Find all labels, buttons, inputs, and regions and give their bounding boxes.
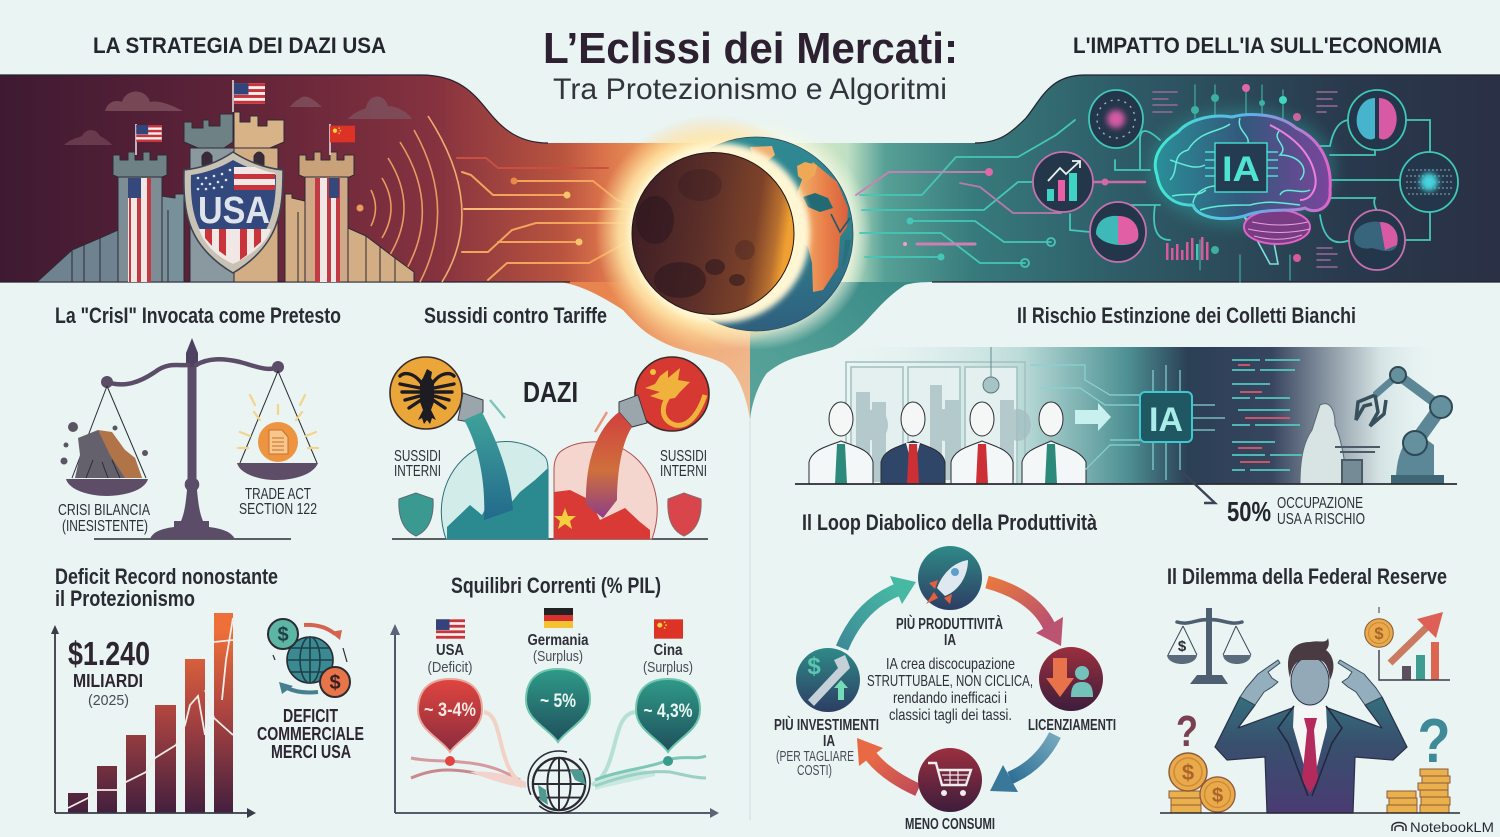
pans	[66, 371, 318, 496]
pin: usa	[418, 679, 482, 752]
earth	[659, 137, 853, 331]
jacket	[1215, 697, 1407, 813]
lapels	[1278, 706, 1342, 796]
icon: globe and currency exchange	[268, 619, 350, 697]
ground line	[795, 483, 1457, 485]
shirt	[1293, 706, 1327, 790]
label: deficit commerciale: DEFICIT	[283, 706, 338, 726]
node: layoffs	[1039, 647, 1103, 711]
circle: growth chart	[1033, 152, 1093, 212]
heading: federal reserve: Il Dilemma della Federal Reserve	[1167, 564, 1447, 589]
right circuit lines	[856, 84, 1430, 282]
sound wave arcs	[356, 116, 462, 282]
centre divider	[749, 420, 751, 820]
pin: germany: ~ 5%	[540, 691, 576, 712]
label: meno consumi: MENO CONSUMI	[905, 816, 995, 833]
arrow: productivity to layoffs	[987, 582, 1063, 646]
cracks	[68, 618, 233, 808]
heading: impatto IA: L'IMPATTO DELL'IA SULL'ECONOMIA	[1073, 33, 1442, 58]
shield: teal	[399, 493, 433, 536]
moon	[632, 152, 794, 314]
icon: globe and currency exchange: $	[329, 672, 341, 694]
robot arm	[1356, 367, 1452, 484]
circuit traces	[1030, 365, 1225, 480]
chart: current account	[390, 608, 719, 818]
axis arrows	[51, 625, 256, 818]
gyri lines	[1170, 118, 1310, 210]
AI circles	[1033, 90, 1458, 270]
node dots	[445, 756, 673, 766]
chart: deficit bars	[51, 613, 256, 818]
flags	[136, 80, 330, 155]
body 4: classici tagli dei tassi.	[889, 707, 1012, 724]
china flag	[654, 619, 683, 639]
circle: brain side	[1349, 210, 1405, 270]
neck and face	[1291, 657, 1329, 705]
body 1: IA crea discocupazione	[886, 656, 1015, 673]
left bowl	[441, 442, 548, 539]
panel: fed dilemma	[1160, 607, 1460, 813]
logo: notebooklm: NotebookLM	[1410, 819, 1494, 835]
label: surplus cn: (Surplus)	[643, 659, 693, 676]
heading: la strategia dei dazi USA: LA STRATEGIA DEI DAZI USA	[93, 33, 386, 58]
rock	[60, 422, 148, 478]
craters	[636, 169, 755, 298]
usa flag	[436, 619, 465, 639]
heading: deficit record: Deficit Record nonostante	[55, 564, 278, 589]
icon: globe	[528, 751, 590, 813]
label: più produttività: PIÙ PRODUTTIVITÀ	[896, 614, 1003, 633]
node: productivity	[918, 546, 982, 610]
continents	[750, 146, 851, 292]
stat label: occupazione: OCCUPAZIONE	[1277, 495, 1363, 512]
label: section 122: SECTION 122	[239, 501, 317, 518]
shield: red	[668, 493, 701, 536]
label: surplus de: (Surplus)	[533, 648, 583, 665]
heading: sussidi: Sussidi contro Tariffe	[424, 303, 607, 328]
icon: small scale	[1167, 608, 1251, 684]
scene gradient	[840, 347, 1440, 484]
ground line	[1160, 812, 1460, 814]
lamp	[983, 347, 999, 393]
AI chip: IA	[1149, 401, 1183, 439]
cerebellum	[1244, 210, 1310, 244]
arrow: layoffs to less spending	[990, 735, 1055, 792]
pin: usa: ~ 3-4%	[424, 700, 476, 721]
central tower	[184, 112, 284, 282]
eclipse	[595, 115, 872, 351]
right hand	[1338, 660, 1382, 705]
label: sussidi interni right: SUSSIDI	[660, 448, 707, 465]
scale stand	[101, 338, 284, 539]
panel: subsidies vs tariffs	[390, 357, 709, 539]
label: per tagliare: (PER TAGLIARE	[776, 748, 854, 765]
label: crisi bilancia: CRISI BILANCIA	[58, 502, 150, 519]
panel: white collar scene	[795, 347, 1457, 503]
germany flag	[544, 608, 573, 628]
mini bars under brain	[1166, 237, 1208, 260]
label: costi: COSTI)	[797, 762, 832, 779]
worker 4	[1022, 402, 1086, 484]
outer walls	[37, 194, 414, 282]
diagram: productivity loop	[774, 546, 1116, 833]
arrow: less spending to investment	[857, 738, 918, 790]
chip pins	[1205, 152, 1278, 176]
coins right	[1387, 769, 1450, 813]
label: interni left: INTERNI	[394, 463, 441, 480]
circle: neural node	[1089, 90, 1143, 148]
unit: MILIARDI	[73, 671, 143, 691]
stat: 50 percent: 50%	[1227, 496, 1271, 527]
circle: brain	[1090, 202, 1146, 262]
stars on shield	[197, 169, 231, 190]
question mark: teal: ?	[1418, 707, 1450, 776]
body 3: rendando inefficaci i	[893, 690, 1007, 707]
worker 3	[951, 402, 1013, 484]
axis arrowheads	[390, 624, 719, 818]
node: investments	[796, 648, 860, 712]
hair	[1288, 638, 1333, 680]
icon: globe and currency exchange: $	[277, 624, 289, 646]
body 2: STRUTTUBALE, NON CICLICA,	[867, 673, 1033, 690]
pointer	[1182, 472, 1215, 503]
worker 1	[809, 402, 873, 484]
pipes	[458, 393, 647, 427]
arrow	[1075, 403, 1111, 431]
coins left	[1169, 753, 1235, 813]
clouds	[64, 92, 412, 145]
code lines	[1232, 360, 1310, 470]
circle: processor	[1400, 152, 1458, 212]
left tower	[113, 152, 167, 282]
title: L’Eclissi dei Mercati:	[543, 24, 958, 73]
lab robot	[1300, 404, 1380, 484]
label: cina: Cina	[654, 642, 683, 659]
label: usa: USA	[436, 642, 464, 659]
node: less spending	[918, 748, 982, 812]
icon: rising chart	[1365, 607, 1450, 680]
illustration: USA castle and shield	[37, 80, 414, 282]
shield	[184, 152, 283, 273]
label: interni right: INTERNI	[660, 463, 707, 480]
banner: AI, right band	[750, 75, 1500, 282]
pin: china	[636, 679, 700, 752]
circle: brain top	[1348, 90, 1406, 150]
panel: balance scale	[58, 338, 318, 539]
label: più investimenti: PIÙ INVESTIMENTI	[774, 715, 879, 734]
heading: loop diabolico: Il Loop Diabolico della Produttività	[802, 510, 1098, 535]
label: deficit: (Deficit)	[428, 659, 472, 676]
halo around earth	[640, 118, 872, 350]
label: inesistente: (INESISTENTE)	[62, 518, 148, 535]
right bowl	[554, 442, 657, 539]
right tower	[299, 152, 354, 282]
lower lobes under the eclipse	[560, 282, 932, 420]
question mark: red: ?	[1176, 707, 1198, 756]
label: germania: Germania	[528, 632, 589, 649]
arrow: investment to productivity	[842, 576, 916, 648]
label: sussidi interni left: SUSSIDI	[394, 448, 441, 465]
node: investments: $	[807, 653, 821, 680]
left hand	[1240, 660, 1280, 705]
chip label: IA	[1222, 150, 1260, 189]
heading: la crisi: La "CrisI" Invocata come Pretesto	[55, 303, 341, 328]
emblem: germany	[390, 357, 462, 429]
bars	[68, 613, 233, 813]
banner: tariffs, left band	[0, 75, 750, 282]
flows	[411, 712, 706, 790]
crescent glow	[630, 143, 810, 323]
stem	[1245, 218, 1278, 264]
illustration: AI brain	[1150, 110, 1334, 264]
label: merci usa: MERCI USA	[271, 742, 351, 762]
cerebrum	[1155, 115, 1330, 219]
axes	[55, 632, 252, 813]
worker 2	[881, 402, 945, 484]
office windows	[846, 362, 1025, 484]
label: ia 2: IA	[823, 733, 835, 750]
chip	[1215, 143, 1267, 192]
glowing document	[238, 395, 318, 462]
value: $1.240	[68, 635, 150, 672]
label: licenziamenti: LICENZIAMENTI	[1028, 717, 1116, 734]
stat label: usa a rischio: USA A RISCHIO	[1277, 511, 1365, 528]
pin: china: ~ 4,3%	[644, 701, 693, 722]
label: trade act: TRADE ACT	[245, 486, 311, 503]
heading: squilibri: Squilibri Correnti (% PIL)	[451, 573, 661, 598]
label: ia: IA	[944, 632, 956, 649]
person	[1215, 638, 1407, 813]
heading: colletti bianchi: Il Rischio Estinzione dei Colletti Bianchi	[1017, 303, 1356, 328]
tie	[1302, 718, 1318, 793]
label: dazi: DAZI	[523, 377, 578, 409]
label: commerciale: COMMERCIALE	[257, 724, 364, 744]
heading: il protezionismo: il Protezionismo	[55, 586, 195, 611]
pin: germany	[526, 669, 590, 742]
AI chip	[1140, 392, 1192, 442]
emblem: china dragon	[635, 357, 709, 431]
buildings and silhouettes	[856, 385, 1031, 482]
icon: small scale: $	[1178, 638, 1187, 655]
year: (2025)	[88, 692, 129, 709]
left circuit lines	[457, 158, 636, 280]
streams	[464, 400, 632, 520]
subtitle: Tra Protezionismo e Algoritmi	[553, 73, 947, 106]
shield label: USA	[198, 190, 270, 232]
glow	[595, 115, 831, 351]
